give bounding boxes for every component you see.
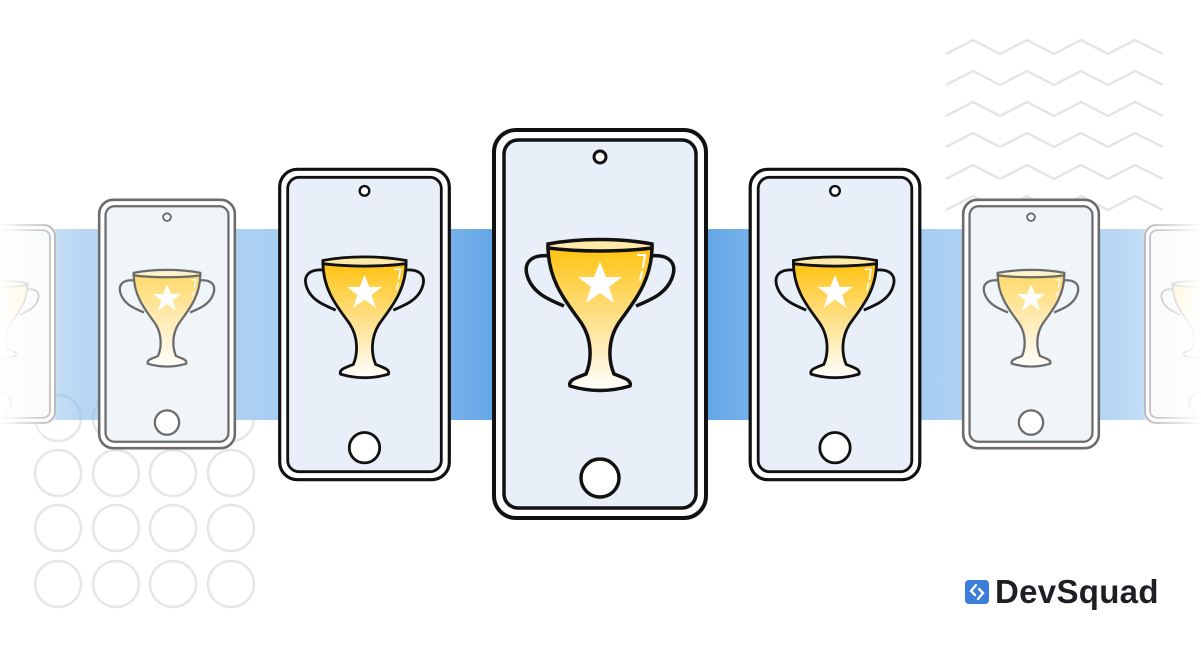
background circle pattern [35,395,254,607]
phone: left medium [280,169,449,480]
phone: right medium [750,169,920,480]
phone: right small [962,199,1100,449]
background zigzag pattern [946,40,1163,210]
phone: far right faded [1144,224,1201,424]
icon: logo mark [965,580,989,604]
phone: far left faded [0,224,56,424]
edge fades [0,215,60,435]
blue band [0,229,1201,420]
phone: center large with trophy [494,130,706,518]
phone: left small [98,199,236,449]
logo: DevSquad: DevSquad [995,573,1159,610]
